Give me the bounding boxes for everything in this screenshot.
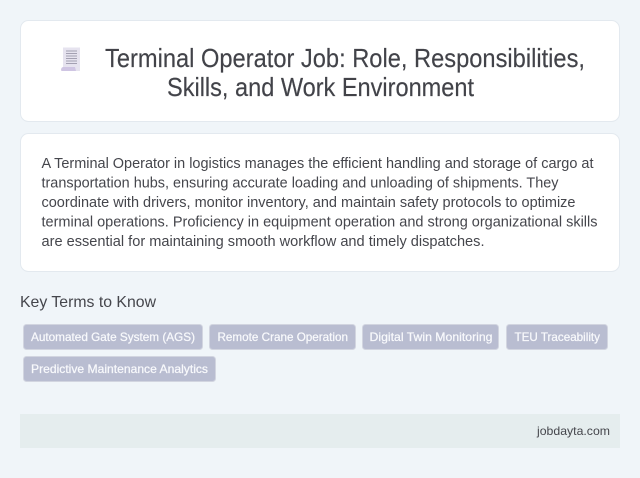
footer bar — [20, 414, 620, 448]
icon: document scroll — [61, 48, 80, 71]
heading: key terms: Key Terms to Know — [20, 294, 156, 311]
description text: transportation hubs, ensuring accurate loading and unloading of shipments. They — [42, 176, 559, 192]
footer source: jobdayta.com — [536, 424, 610, 438]
title: Skills, and Work Environment — [167, 74, 474, 102]
tag: Predictive Maintenance Analytics — [24, 356, 216, 382]
title — [105, 45, 585, 102]
tag: Predictive Maintenance Analytics: Predictive Maintenance Analytics — [31, 362, 208, 376]
description text: coordinate with drivers, monitor inventory, and maintain safety protocols to optimize — [42, 195, 576, 211]
panel: description — [20, 134, 620, 272]
description text: are essential for maintaining smooth workflow and timely dispatches. — [42, 234, 484, 250]
tag list — [24, 324, 608, 382]
title: Terminal Operator Job: Role, Responsibilities, — [105, 45, 585, 73]
tag: Digital Twin Monitoring — [362, 324, 498, 350]
tag: Automated Gate System — [24, 324, 202, 350]
panel: title card — [20, 20, 620, 122]
tag: Automated Gate System: Automated Gate System (AGS) — [31, 330, 195, 344]
description text — [42, 156, 598, 250]
tag: TEU Traceability — [506, 324, 608, 350]
tag: Remote Crane Operation: Remote Crane Operation — [218, 330, 348, 344]
tag: Remote Crane Operation — [210, 324, 356, 350]
tag: Digital Twin Monitoring: Digital Twin Monitoring — [370, 330, 492, 344]
description text: terminal operations. Proficiency in equipment operation and strong organizational skills — [42, 214, 598, 230]
tag: TEU Traceability: TEU Traceability — [514, 330, 600, 344]
description text: A Terminal Operator in logistics manages the efficient handling and storage of cargo at — [42, 156, 594, 172]
